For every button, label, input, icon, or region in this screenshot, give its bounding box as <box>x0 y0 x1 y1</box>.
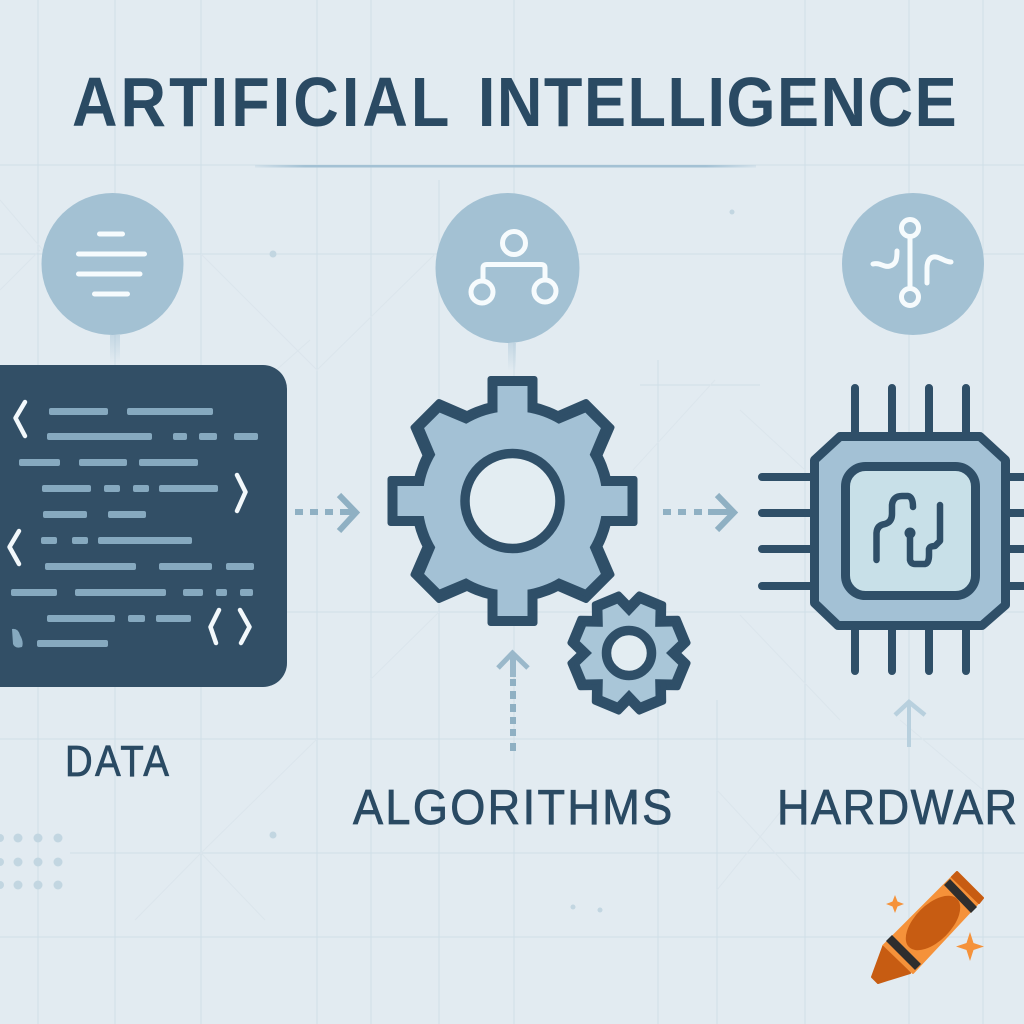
title underline <box>255 165 756 168</box>
label: data: DATA <box>65 737 169 786</box>
decorative dot cluster <box>0 210 734 912</box>
chip body <box>814 436 1006 626</box>
icon: large gear <box>390 379 634 623</box>
icon: microchip <box>762 388 1024 671</box>
chip core <box>846 466 976 596</box>
icon: algorithm hierarchy circle <box>436 193 580 343</box>
icon: small gear <box>567 591 691 715</box>
title: INTELLIGENCE <box>478 64 958 142</box>
code lines <box>11 408 258 648</box>
algorithms connector fade <box>508 343 516 371</box>
panel: data code block <box>0 365 287 687</box>
icon: data lines circle <box>42 193 184 335</box>
title: ARTIFICIAL <box>72 64 452 142</box>
arrow: data to algorithms <box>295 495 356 531</box>
data connector fade <box>110 335 120 363</box>
arrow: up into gear <box>498 653 528 751</box>
label: hardware: HARDWAR <box>777 779 1017 834</box>
chip pins <box>762 388 1024 671</box>
icon: crayon with sparkles <box>872 872 984 983</box>
chip circuit trace <box>876 496 940 564</box>
arrow: algorithms to hardware <box>663 495 734 530</box>
code brackets <box>10 402 250 643</box>
sparkle large <box>956 932 984 961</box>
arrow: up into chip <box>895 702 925 747</box>
label: algorithms: ALGORITHMS <box>353 779 672 834</box>
icon: hardware circuit circle <box>842 193 984 335</box>
sparkle small <box>886 895 904 913</box>
